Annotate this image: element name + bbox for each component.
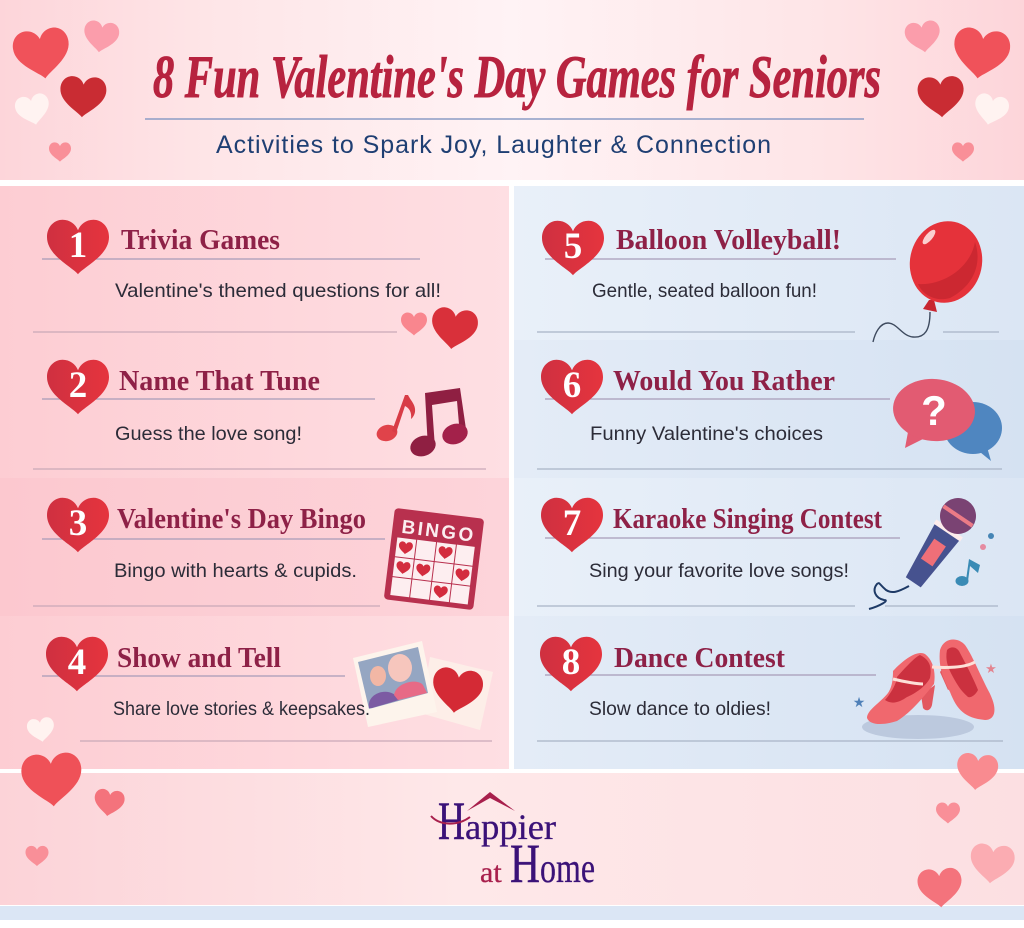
game 4: show and tell: Share love stories & keepsakes. [113, 698, 370, 720]
icon: music notes [375, 388, 471, 460]
game 7: karaoke singing contest: 7 [563, 503, 581, 544]
title rule [145, 118, 864, 120]
game 1: trivia games: Trivia Games [121, 224, 280, 256]
game 8: dance contest: Dance Contest [614, 642, 785, 674]
game 1: trivia games: 1 [69, 225, 87, 266]
game 5: balloon volleyball: Gentle, seated balloon fun! [592, 280, 817, 302]
footer hearts left [20, 716, 126, 866]
game 7: karaoke singing contest: Karaoke Singing Contest [613, 503, 882, 535]
icon: speech bubbles: ? [921, 387, 947, 434]
panel: right column backgrounds [514, 186, 1024, 769]
game 2: name that tune: Name That Tune [119, 365, 320, 397]
game 6: would you rather: 6 [563, 365, 581, 406]
game 7: karaoke singing contest [537, 491, 998, 609]
game 8: dance contest: 8 [562, 642, 580, 683]
icon: bingo card: BINGO [400, 517, 474, 547]
game 5: balloon volleyball: Balloon Volleyball! [616, 224, 841, 256]
icon: two hearts [401, 306, 480, 352]
game 8: dance contest [537, 637, 1003, 741]
game 6: would you rather: Funny Valentine's choices [590, 423, 823, 445]
game 1: trivia games: Valentine's themed questions for all! [115, 280, 441, 302]
game 4: show and tell: Show and Tell [117, 642, 281, 674]
icon: red balloon [873, 214, 990, 342]
logo: Happier at Home: ome [540, 846, 595, 892]
icon: microphone [869, 491, 994, 609]
icon: speech bubbles [890, 376, 1002, 461]
panel: left column backgrounds [0, 186, 509, 769]
game 6: would you rather: Would You Rather [613, 365, 835, 397]
icon: photo and heart cards [353, 641, 493, 730]
game 8: dance contest: Slow dance to oldies! [589, 698, 771, 720]
game 5: balloon volleyball [537, 214, 999, 342]
logo: Happier at Home: H [438, 791, 465, 851]
game 3: valentine's day bingo: Valentine's Day Bingo [117, 503, 366, 535]
bottom blue strip [0, 906, 1024, 920]
logo: Happier at Home: at [480, 856, 502, 889]
game 1: trivia games [33, 220, 480, 352]
icon: red dance shoes [853, 640, 997, 739]
icon: red dance shoes: ★ [985, 662, 997, 677]
game 4: show and tell: 4 [68, 642, 86, 683]
game 5: balloon volleyball: 5 [564, 226, 582, 267]
game 6: would you rather [537, 360, 1002, 469]
icon: bingo card [384, 508, 484, 610]
logo: Happier at Home: appier [465, 807, 556, 847]
footer panel [0, 773, 1024, 905]
game 2: name that tune: Guess the love song! [115, 423, 302, 445]
game 3: valentine's day bingo: 3 [69, 503, 87, 544]
footer hearts right [917, 752, 1016, 909]
header banner [0, 0, 1024, 180]
game 3: valentine's day bingo [33, 498, 484, 610]
logo: Happier at Home: H [510, 833, 540, 894]
game 7: karaoke singing contest: Sing your favorite love songs! [589, 560, 849, 582]
logo: Happier at Home [431, 791, 595, 894]
game 4: show and tell [42, 637, 493, 741]
game 2: name that tune [33, 360, 486, 469]
header hearts left [11, 19, 120, 162]
header hearts right [904, 19, 1012, 162]
subtitle: Activities to Spark Joy, Laughter & Connection [216, 131, 771, 159]
game 3: valentine's day bingo: Bingo with hearts & cupids. [114, 560, 357, 582]
icon: red dance shoes: ★ [853, 695, 865, 711]
game 2: name that tune: 2 [69, 365, 87, 406]
